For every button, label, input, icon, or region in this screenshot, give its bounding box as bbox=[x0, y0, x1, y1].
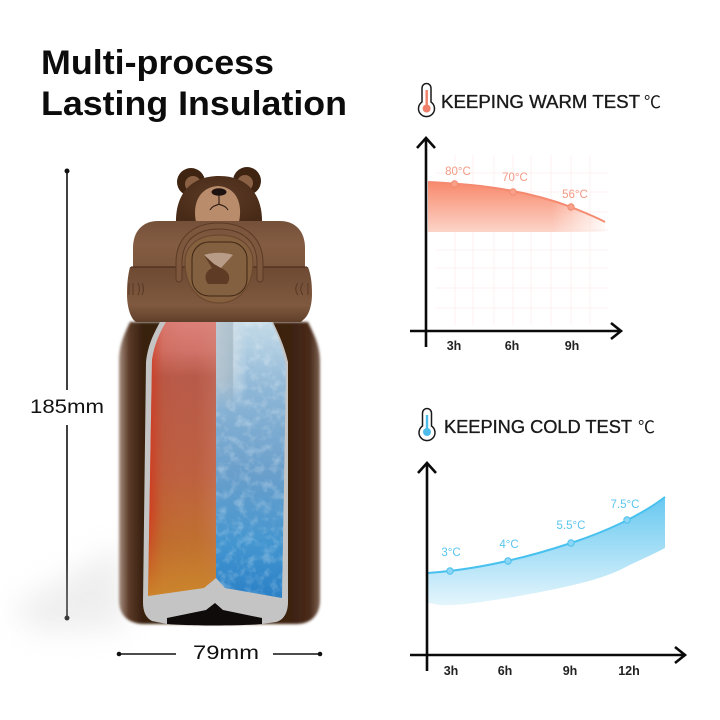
warm time labels: 6h bbox=[505, 339, 519, 353]
title bbox=[41, 44, 347, 123]
cold time labels: 12h bbox=[618, 664, 640, 678]
icon: cold thermometer bbox=[419, 408, 435, 441]
cold time labels: 3h bbox=[444, 664, 458, 678]
base recess bbox=[167, 603, 262, 626]
warm time labels: 3h bbox=[447, 339, 461, 353]
cold test heading bbox=[419, 408, 655, 441]
cold time labels: 6h bbox=[498, 664, 512, 678]
hot liquid section bbox=[148, 322, 216, 596]
cold time labels bbox=[444, 664, 640, 678]
cold area fill bbox=[428, 497, 665, 605]
warm test heading: KEEPING WARM TEST bbox=[441, 92, 640, 112]
cold test heading: KEEPING COLD TEST bbox=[444, 417, 632, 437]
warm area fill bbox=[428, 182, 605, 232]
cutaway shell bbox=[143, 322, 288, 624]
cold value labels: 5.5°C bbox=[557, 520, 585, 532]
warm test heading bbox=[418, 84, 661, 117]
cold ice section bbox=[216, 322, 286, 598]
title: Multi-process bbox=[41, 44, 274, 82]
bottle bbox=[10, 167, 320, 632]
icon: warm thermometer bbox=[418, 84, 434, 117]
bottle body bbox=[119, 322, 320, 624]
width dimension: 79mm bbox=[117, 643, 322, 664]
cold data points bbox=[447, 517, 630, 574]
bear ears bbox=[177, 167, 261, 196]
cold value labels bbox=[441, 499, 639, 559]
cold temperature curve bbox=[428, 497, 665, 573]
infographic canvas bbox=[25, 49, 687, 675]
bear muzzle bbox=[195, 186, 240, 222]
band grip marks bbox=[129, 283, 308, 295]
warm axes bbox=[410, 138, 621, 347]
cold value labels: 4°C bbox=[499, 539, 519, 551]
height dimension: 185mm: 185mm bbox=[30, 397, 104, 418]
height dimension: 185mm bbox=[30, 168, 104, 620]
warm time labels bbox=[447, 339, 579, 353]
chart grid bbox=[436, 155, 608, 325]
title: Lasting Insulation bbox=[41, 85, 347, 123]
warm time labels: 9h bbox=[565, 339, 579, 353]
warm value labels bbox=[445, 166, 588, 201]
ground shadow bbox=[10, 545, 125, 632]
bear head bbox=[176, 176, 262, 224]
warm test chart bbox=[410, 138, 621, 353]
warm data points bbox=[451, 181, 574, 210]
cold value labels: 7.5°C bbox=[611, 499, 639, 511]
cold test heading: ℃ bbox=[638, 418, 655, 437]
warm value labels: 80°C bbox=[445, 166, 471, 178]
lid bbox=[133, 221, 305, 268]
warm test heading: ℃ bbox=[644, 93, 661, 112]
width dimension: 79mm: 79mm bbox=[193, 643, 259, 664]
lid band bbox=[127, 267, 312, 322]
straw bbox=[216, 322, 245, 404]
cold time labels: 9h bbox=[563, 664, 577, 678]
cold test chart bbox=[410, 463, 685, 678]
warm value labels: 56°C bbox=[562, 189, 588, 201]
cold value labels: 3°C bbox=[441, 547, 461, 559]
lid latch arch bbox=[179, 226, 260, 279]
lid button bbox=[185, 235, 253, 303]
warm value labels: 70°C bbox=[502, 172, 528, 184]
warm temperature curve bbox=[428, 182, 605, 222]
cold axes bbox=[410, 463, 685, 671]
